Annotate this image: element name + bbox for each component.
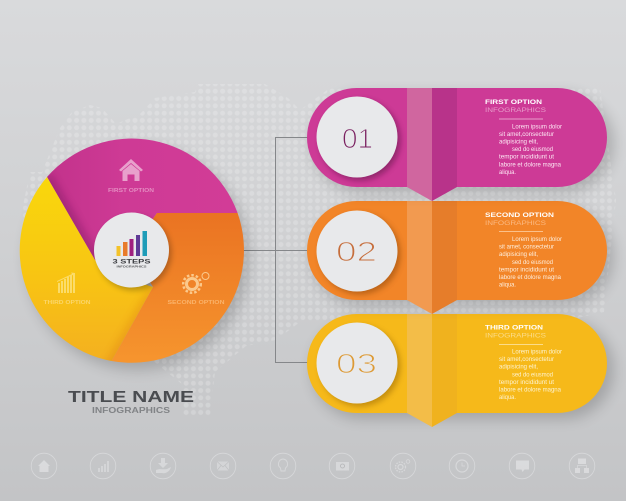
label: third option: THIRD OPTION (44, 300, 91, 306)
icon: network (569, 453, 595, 479)
text block: aliqua. (499, 282, 516, 288)
icon: money (329, 453, 355, 479)
fold ribbon (407, 201, 457, 314)
center badge (94, 212, 172, 290)
text block: INFOGRAPHICS (485, 221, 546, 227)
subtitle: INFOGRAPHICS (92, 406, 171, 415)
text block: adipisicing elit, (499, 251, 538, 258)
text block: Lorem ipsum dolor (512, 123, 562, 130)
panel: second option (307, 201, 614, 314)
text block: tempor incididunt ut (499, 154, 554, 161)
title: TITLE NAME (68, 389, 194, 406)
label: first option: FIRST OPTION (108, 188, 154, 194)
icon: gears (183, 272, 209, 293)
icon row (31, 453, 595, 479)
badge subtitle: INFOGRAPHICS (116, 264, 146, 268)
text block: sit amet,consectetur (499, 356, 554, 363)
text block: adipisicing elit, (499, 364, 538, 371)
slice: second option (112, 211, 245, 363)
fold ribbon (407, 88, 457, 201)
text block: INFOGRAPHICS (485, 334, 546, 340)
number circle (316, 96, 400, 180)
text block: sed do eiusmod (512, 259, 553, 266)
number circle (316, 322, 400, 406)
text block: Lorem ipsum dolor (512, 348, 562, 356)
pie chart (20, 139, 250, 370)
text block: sed do eiusmod (512, 146, 553, 153)
slice: third option (20, 177, 156, 368)
text block: THIRD OPTION (485, 326, 543, 332)
text block: Lorem ipsum dolor (512, 236, 562, 243)
text block: sed do eiusmod (512, 371, 553, 378)
icon: hand (150, 453, 176, 479)
text block: SECOND OPTION (485, 213, 554, 219)
slice: first option (47, 139, 238, 260)
text block: aliqua. (499, 394, 516, 401)
text block: FIRST OPTION (485, 100, 542, 106)
connector lines (240, 138, 316, 362)
world map dots (20, 84, 616, 416)
label: second option: SECOND OPTION (168, 300, 225, 306)
text block (485, 326, 562, 401)
text block: labore et dolore magna (499, 161, 561, 168)
number circle: 03 (336, 348, 377, 379)
text block: adipisicing elit, (499, 138, 538, 146)
fold ribbon (407, 314, 457, 427)
icon: gears (390, 453, 416, 479)
number circle: 01 (342, 123, 373, 154)
icon: rising bars (57, 272, 75, 293)
icon: mail (210, 453, 236, 479)
text block: labore et dolore magna (499, 274, 561, 281)
text block (485, 213, 562, 288)
number circle (316, 210, 400, 294)
text block: labore et dolore magna (499, 386, 561, 394)
panel: third option (307, 314, 614, 427)
number circle: 02 (336, 236, 377, 267)
icon: speech bubble (509, 453, 535, 479)
text block: tempor incididunt ut (499, 266, 554, 273)
icon: bar chart (116, 231, 147, 256)
panel: first option (307, 88, 614, 201)
icon: chart (90, 453, 116, 479)
text block: sit amet,consectetur (499, 131, 554, 138)
text block (485, 100, 562, 176)
badge text: 3 STEPS (112, 258, 151, 266)
icon: home (31, 453, 57, 479)
icon: bulb (270, 453, 296, 479)
text block: tempor incididunt ut (499, 379, 554, 386)
icon: house (119, 159, 143, 181)
text block: INFOGRAPHICS (485, 108, 546, 114)
text block: aliqua. (499, 169, 516, 176)
icon: clock (449, 453, 475, 479)
text block: sit amet, consectetur (499, 244, 554, 251)
